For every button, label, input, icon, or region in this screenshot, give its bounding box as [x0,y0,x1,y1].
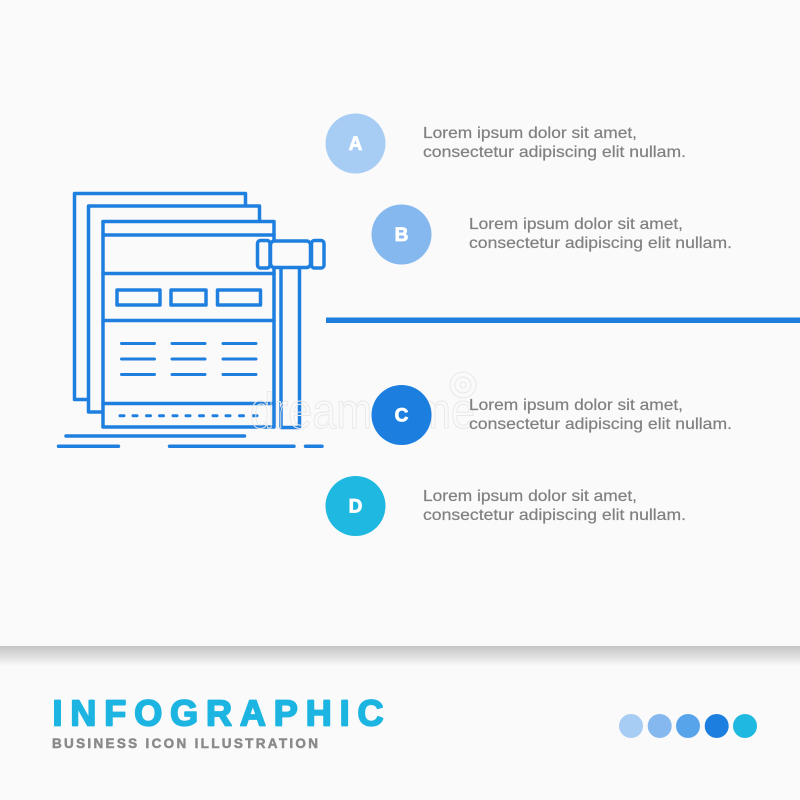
letter B: B [395,225,408,246]
text A: consectetur adipiscing elit nullam. [423,144,686,161]
letter D: D [349,496,362,518]
page buttons [117,290,260,305]
page text lines [122,344,256,374]
circle A [326,114,386,174]
text D [423,488,686,524]
text B [469,216,732,252]
letter A: A [349,134,363,155]
text C: consectetur adipiscing elit nullam. [469,416,732,433]
ground lines [58,436,322,446]
back page [74,194,246,400]
text D: Lorem ipsum dolor sit amet, [423,488,637,505]
circle B [372,204,432,264]
text A [423,125,686,161]
footer shadow band [0,646,800,666]
watermark: dreamstime [250,383,475,439]
page footer dots [120,414,257,417]
icon: web pages with auction hammer [58,194,324,446]
item B [372,204,732,264]
text C [469,397,732,433]
item C [372,385,732,445]
text C: Lorem ipsum dolor sit amet, [469,397,683,414]
circle C [372,385,432,445]
middle page [88,206,260,412]
item D [326,476,686,536]
footer subtitle: BUSINESS ICON ILLUSTRATION [52,736,318,751]
text B: Lorem ipsum dolor sit amet, [469,216,683,233]
footer colour dots [619,714,757,738]
circle D [326,476,386,536]
horizontal divider bar [326,318,800,323]
text A: Lorem ipsum dolor sit amet, [423,125,637,142]
letter C: C [395,406,409,426]
footer title: INFOGRAPHIC [52,692,384,734]
text B: consectetur adipiscing elit nullam. [469,235,732,252]
item A [326,114,686,174]
hammer [258,240,324,428]
text D: consectetur adipiscing elit nullam. [423,507,686,524]
front page [103,222,274,427]
